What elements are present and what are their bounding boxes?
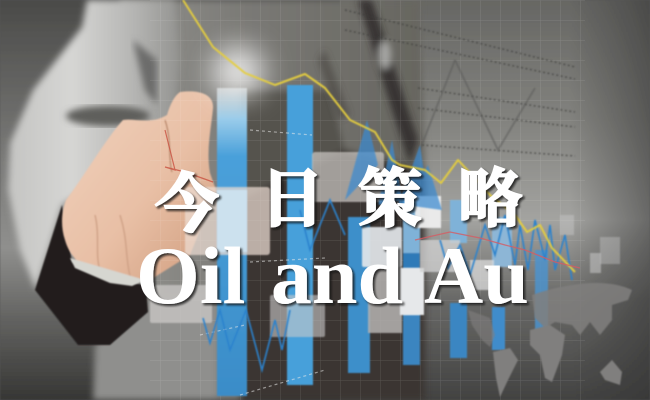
- yellow trend line: [183, 0, 575, 272]
- glow behind fingertip: [212, 46, 264, 98]
- red data line: [415, 232, 580, 268]
- title: 今日策略: 今: [155, 153, 219, 245]
- sleeve: [8, 0, 190, 290]
- title: 今日策略: 策: [358, 148, 422, 240]
- jacket cuff: [35, 205, 148, 345]
- hand pointing: [62, 91, 216, 286]
- world map: [468, 283, 632, 397]
- title: 今日策略: 日: [260, 148, 324, 240]
- red accent on finger: [165, 130, 213, 182]
- subtitle: Oil and Au: Oil and Au: [136, 230, 529, 321]
- dotted trend lines: [345, 10, 575, 156]
- businessman suit: [70, 0, 425, 400]
- chart grid overlay: [150, 0, 585, 400]
- suit lapel shadow: [318, 0, 418, 165]
- title: 今日策略: 略: [458, 148, 522, 240]
- white dashes on chart: [200, 130, 325, 395]
- faint grey peak line: [455, 60, 535, 150]
- blue mountain spikes: [345, 120, 442, 210]
- bar chart: [217, 85, 548, 396]
- faint grey chart line: [410, 60, 455, 175]
- translucent data panels: [150, 152, 620, 337]
- blue jagged data line: [203, 200, 572, 370]
